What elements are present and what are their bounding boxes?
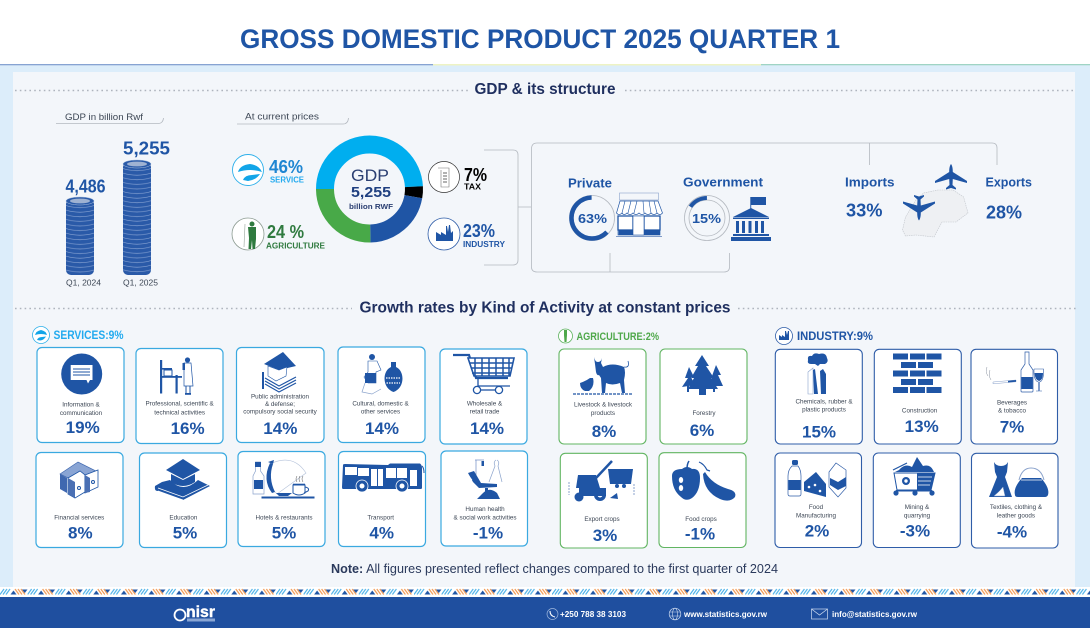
stat: service 46%: SERVICE xyxy=(270,176,305,184)
value: 4% xyxy=(369,523,394,542)
stat: tax 7%: 7% xyxy=(464,165,487,185)
card: professional xyxy=(136,348,223,444)
ring: 63%: 63% xyxy=(578,211,607,226)
card: forestry xyxy=(660,349,747,444)
icon: factory xyxy=(428,218,460,250)
value: 14% xyxy=(263,419,297,438)
icon: service hand xyxy=(232,154,264,186)
icon: dress and bag xyxy=(989,462,1048,497)
value: 7% xyxy=(1000,418,1024,437)
card: financial services xyxy=(36,452,123,548)
imports xyxy=(845,174,894,220)
label: Hotels & restaurants xyxy=(255,514,313,521)
icon: woman and basket xyxy=(362,354,402,394)
card: information and communication xyxy=(37,348,124,442)
services heading: SERVICES:9% xyxy=(54,330,124,342)
donut centre label: 5,255 xyxy=(351,185,391,201)
card: beverages and tobacco xyxy=(971,349,1058,444)
value: -1% xyxy=(473,523,503,542)
chart heading xyxy=(237,112,348,124)
icon: plane exports xyxy=(935,164,967,190)
card: cultural xyxy=(338,347,425,442)
panel: GDP at current prices xyxy=(232,112,506,250)
stat: tax 7% xyxy=(464,165,487,192)
value: 6% xyxy=(690,421,714,440)
decorative trim xyxy=(0,587,1090,597)
ring: 15%: 15% xyxy=(692,211,721,226)
chart heading: GDP in billion Rwf xyxy=(65,112,144,122)
label: Professional, scientific & xyxy=(145,400,215,407)
panel: GDP in billion Rwf coin chart xyxy=(56,112,170,288)
agriculture heading: AGRICULTURE:2% xyxy=(576,331,659,343)
value: 5% xyxy=(173,523,197,542)
stat: service 46%: 46% xyxy=(269,157,303,177)
label: Beverages xyxy=(997,400,1027,407)
heading private: Private xyxy=(568,176,612,190)
logo: nisr xyxy=(174,604,215,622)
value: 2% xyxy=(805,522,829,541)
label: retail trade xyxy=(470,409,500,416)
exports: Exports xyxy=(986,174,1032,190)
icon: shopping cart xyxy=(453,355,514,394)
panel: trade xyxy=(845,164,1032,237)
icon: milk, cheese and carton xyxy=(788,460,846,497)
icon: tax document xyxy=(428,162,460,192)
card: chemicals xyxy=(775,349,862,444)
heading: growth rates: Growth rates by Kind of Activity at constant prices xyxy=(360,300,730,316)
heading: GDP and its structure: GDP & its structure xyxy=(474,81,616,98)
icon: scientist at lab xyxy=(160,357,193,395)
card: food crops xyxy=(659,453,746,548)
industry heading xyxy=(776,328,873,344)
icon: government building xyxy=(731,197,771,241)
label: other services xyxy=(361,409,400,416)
value: -3% xyxy=(900,522,930,541)
icon: pepper and eggplant xyxy=(672,461,735,501)
heading government: Government xyxy=(683,174,764,190)
map of Rwanda xyxy=(902,190,968,237)
value 5,255: 5,255 xyxy=(123,138,170,158)
card: human health xyxy=(441,451,528,546)
title: GROSS DOMESTIC PRODUCT 2025 QUARTER 1 xyxy=(240,24,840,54)
value: 8% xyxy=(68,523,93,542)
contact: website xyxy=(669,608,768,620)
icon: bus xyxy=(342,464,424,492)
icon: house on books xyxy=(262,352,296,392)
card: food manufacturing xyxy=(775,453,862,548)
note: Note: All figures presented reflect changes compared to the first quarter of 2024 xyxy=(331,562,778,576)
label: Wholesale & xyxy=(467,400,503,407)
donut centre label: GDP xyxy=(351,167,389,185)
value: 13% xyxy=(905,417,939,436)
icon: money stacks xyxy=(60,462,98,498)
panel: agriculture xyxy=(558,329,747,548)
label: communication xyxy=(60,410,103,417)
card: education xyxy=(140,453,226,548)
label: Food xyxy=(809,504,824,511)
value: -1% xyxy=(685,525,715,544)
panel: government consumption xyxy=(679,174,771,246)
services heading xyxy=(32,326,124,344)
connector bracket xyxy=(484,150,531,265)
stat: industry 23% xyxy=(463,221,506,249)
value: 14% xyxy=(365,419,399,438)
card: textiles xyxy=(972,453,1058,548)
card: hotels and restaurants xyxy=(238,452,325,546)
stat: industry 23%: 23% xyxy=(463,221,495,241)
label: Cultural, domestic & xyxy=(352,400,409,407)
label: quarrying xyxy=(904,513,931,520)
chart heading xyxy=(56,112,164,124)
label: & social work activities xyxy=(454,515,516,522)
value: 14% xyxy=(470,419,504,438)
imports: Imports xyxy=(845,174,894,190)
industry heading: INDUSTRY:9% xyxy=(797,331,873,343)
value: 15% xyxy=(802,423,836,442)
label: Textiles, clothing & xyxy=(990,504,1043,511)
icon: speech bubble xyxy=(61,354,102,394)
label: & tobacco xyxy=(998,408,1026,415)
label: Food crops xyxy=(685,516,717,523)
card: wholesale xyxy=(440,349,527,444)
icon: mine cart xyxy=(893,457,935,496)
icon: shop xyxy=(616,193,662,236)
value: 16% xyxy=(171,419,205,438)
logo: nisr: nisr xyxy=(186,604,215,621)
exports xyxy=(986,174,1032,222)
label: technical activities xyxy=(154,409,205,416)
label: Forestry xyxy=(692,410,716,417)
label: compulsory social security xyxy=(243,408,318,415)
contact: website: www.statistics.gov.rw xyxy=(683,610,768,619)
value: 3% xyxy=(593,526,617,545)
label: Construction xyxy=(902,408,938,415)
value 4,486: 4,486 xyxy=(66,176,106,196)
label Q1 2025: Q1, 2025 xyxy=(123,278,159,288)
icon: dental chair xyxy=(468,460,502,499)
panel: services xyxy=(32,326,528,548)
label: Education xyxy=(169,515,198,522)
value: 19% xyxy=(66,418,100,437)
label Q1 2024: Q1, 2024 xyxy=(66,278,102,288)
contact: phone xyxy=(547,608,627,620)
stat: agriculture 24% xyxy=(266,222,326,250)
label: products xyxy=(591,410,615,417)
icon: farmer xyxy=(232,218,264,250)
icon: cigarette, bottle and glass xyxy=(986,352,1044,392)
label: Manufacturing xyxy=(796,513,836,520)
card: livestock xyxy=(559,349,646,444)
label: Livestock & livestock xyxy=(574,402,633,409)
label: Public administration xyxy=(251,393,310,400)
card: public administration xyxy=(236,348,324,442)
card: export crops xyxy=(560,453,647,548)
label: & defense; xyxy=(265,401,295,408)
value: 8% xyxy=(592,422,616,441)
chart heading: At current prices xyxy=(245,112,320,122)
stat: agriculture 24%: 24 % xyxy=(267,222,304,242)
icon: chimneys and smoke xyxy=(808,353,828,394)
imports: 33% xyxy=(846,200,882,220)
card: construction xyxy=(874,349,961,444)
icon: harvester xyxy=(569,461,634,502)
label: Export crops xyxy=(584,516,620,523)
card: mining and quarrying xyxy=(873,453,960,548)
label: Mining & xyxy=(905,504,930,511)
stat: industry 23%: INDUSTRY xyxy=(463,240,506,249)
icon: brick wall xyxy=(893,354,942,393)
icon: trees xyxy=(682,355,723,395)
label: leather goods xyxy=(997,513,1035,520)
footer xyxy=(0,597,1090,628)
icon: plane imports xyxy=(903,195,935,220)
label: plastic products xyxy=(802,407,846,414)
value: 5% xyxy=(272,523,296,542)
icon: bottle, cloche and cup xyxy=(253,460,314,498)
coin stack: Q1 2024 xyxy=(66,197,94,275)
stat: agriculture 24%: AGRICULTURE xyxy=(266,242,326,250)
contact: phone: +250 788 38 3103 xyxy=(560,610,627,619)
coin stack: Q1 2025 xyxy=(123,160,151,275)
icon: cow and hen xyxy=(573,357,633,394)
donut centre label xyxy=(349,167,393,211)
panel: private consumption xyxy=(563,176,662,247)
main panel xyxy=(13,72,1075,587)
label: Human health xyxy=(465,506,505,513)
agriculture heading xyxy=(558,329,659,343)
value: -4% xyxy=(997,523,1027,542)
panel: industry xyxy=(775,328,1058,548)
icon: graduation cap on book xyxy=(155,459,210,500)
label: Chemicals, rubber & xyxy=(795,398,853,405)
donut chart xyxy=(318,137,421,241)
label: Transport xyxy=(367,515,394,522)
contact: email: info@statistics.gov.rw xyxy=(832,610,918,619)
stat: tax 7%: TAX xyxy=(464,182,482,192)
connector frame xyxy=(532,143,997,272)
donut centre label: billion RWF xyxy=(349,202,393,211)
label: Information & xyxy=(62,401,101,408)
label: Financial services xyxy=(54,515,104,522)
card: transport xyxy=(338,452,426,546)
exports: 28% xyxy=(986,202,1022,222)
